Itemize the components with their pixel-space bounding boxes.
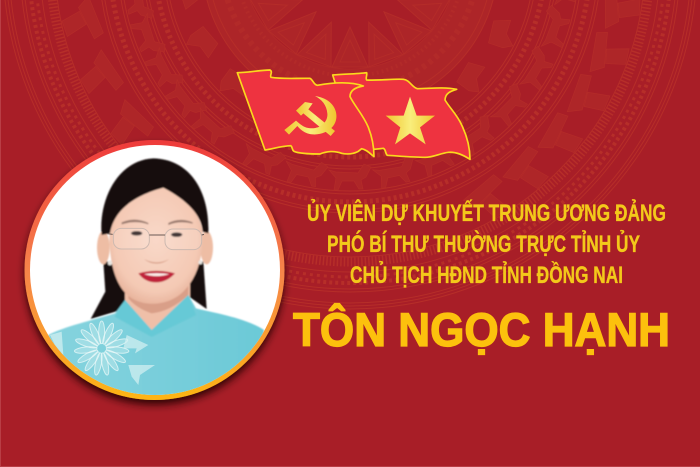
flags emblem: [237, 70, 470, 159]
lips: [138, 271, 175, 282]
glasses: [107, 228, 204, 250]
collar: [115, 295, 196, 337]
title lines: [307, 198, 666, 289]
drum figures: birds and animals: [58, 0, 643, 228]
bronze drum pattern: [3, 0, 697, 309]
neck: [125, 278, 190, 332]
earrings: [108, 261, 112, 265]
hair top: [101, 158, 208, 235]
face: [109, 187, 203, 304]
hammer and sickle: [284, 96, 336, 136]
portrait: [30, 145, 280, 398]
portrait ring: [24, 140, 284, 400]
ears: [97, 231, 213, 264]
party flag: [237, 70, 374, 157]
national flag: [333, 73, 470, 159]
long hair: [91, 262, 207, 319]
eyes and brows: [122, 220, 193, 237]
lace flower: [74, 321, 129, 376]
neck shadow: [128, 285, 188, 313]
ao dai dress: [48, 295, 264, 398]
drum star triangles: [243, 0, 457, 67]
name: TÔN NGỌC HẠNH: [293, 302, 670, 357]
lace leaves: [50, 332, 155, 385]
nose: [146, 260, 168, 264]
star: [386, 97, 435, 144]
